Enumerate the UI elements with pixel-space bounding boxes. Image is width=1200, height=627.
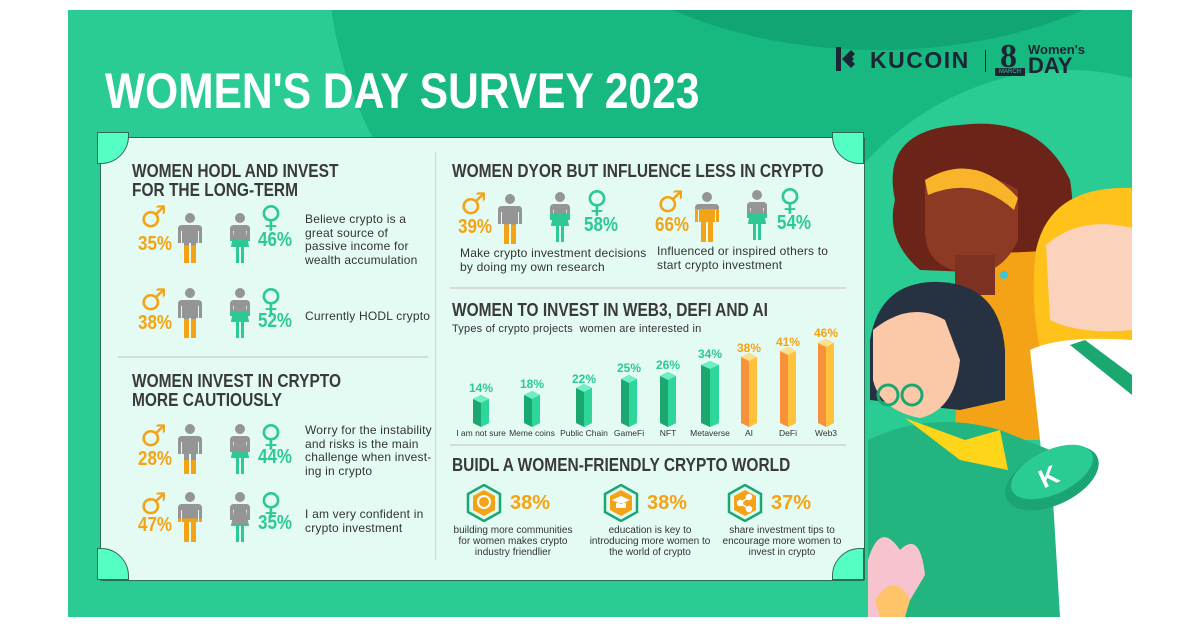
row: hodl crypto: Currently HODL crypto (305, 309, 430, 323)
illustration: women: K (1034, 459, 1064, 494)
heading: web3: WOMEN TO INVEST IN WEB3, DEFI AND AI (452, 300, 768, 320)
logo: KuCoin and Women's Day: MARCH (999, 69, 1021, 75)
item: share tips: 37% (771, 492, 811, 514)
row: influenced (655, 183, 828, 272)
logo: KuCoin and Women's Day: KUCOIN (870, 47, 970, 73)
bar chart: GameFi (614, 428, 644, 438)
row: hodl crypto: ♂ (140, 283, 167, 318)
heading: cautiously: MORE CAUTIOUSLY (132, 390, 282, 410)
item: share tips: share investment tips to encourage more women to invest in crypto (723, 525, 841, 558)
row: passive income: 35% (138, 233, 172, 255)
row: own research: 39% (458, 216, 492, 238)
bar chart: 18% (520, 377, 544, 391)
bar chart: Metaverse (690, 428, 730, 438)
bar chart: Web3 (815, 428, 837, 438)
row: influenced: 54% (777, 212, 811, 234)
row: own research: Make crypto investment decisions by doing my own research (460, 246, 646, 274)
row: passive income (138, 200, 418, 266)
row: own research: ♀ (586, 185, 608, 220)
item: share tips (722, 484, 841, 558)
item: communities: 38% (510, 492, 550, 514)
heading: hodl (132, 161, 338, 200)
logo: KuCoin and Women's Day: DAY (1028, 53, 1072, 78)
row: influenced: ♀ (779, 183, 801, 218)
heading: hodl: WOMEN HODL AND INVEST (132, 161, 338, 181)
row: influenced: Influenced or inspired others to start crypto investment (657, 244, 828, 272)
row: influenced: ♂ (657, 185, 684, 220)
bar chart: Public Chain (560, 428, 608, 438)
bar chart: 26% (656, 358, 680, 372)
heading: dyor: WOMEN DYOR BUT INFLUENCE LESS IN CRYPTO (452, 161, 824, 181)
row: confident: 47% (138, 514, 172, 536)
row: passive income: 46% (258, 229, 292, 251)
row: confident: I am very confident in crypto investment (305, 507, 423, 534)
row: worry: Worry for the instability and risks is the main challenge when invest-ing in crypto (305, 423, 432, 478)
row: worry: ♂ (140, 419, 167, 454)
row: passive income: ♂ (140, 200, 167, 235)
row: hodl crypto: 38% (138, 312, 172, 334)
bar chart: I am not sure (456, 428, 506, 438)
bar chart: AI (745, 428, 753, 438)
row: confident: ♀ (260, 487, 282, 522)
bar chart (456, 326, 838, 438)
bar chart: 34% (698, 347, 722, 361)
row: passive income: ♀ (260, 200, 282, 235)
row: own research: 58% (584, 214, 618, 236)
subtitle: Types of crypto projects women are interested in (452, 323, 701, 335)
bar chart: 25% (617, 361, 641, 375)
row: confident: ♂ (140, 487, 167, 522)
bar chart: DeFi (779, 428, 797, 438)
row: worry: 44% (258, 446, 292, 468)
main panel (100, 137, 865, 581)
logo: KuCoin and Women's Day: 8 (1000, 38, 1017, 75)
heading: hodl: FOR THE LONG-TERM (132, 180, 298, 200)
row: own research (458, 185, 646, 274)
logo: KuCoin and Women's Day (836, 38, 1085, 78)
row: worry (138, 419, 432, 478)
bar chart: 38% (737, 341, 761, 355)
item: education: 38% (647, 492, 687, 514)
item: education: education is key to introducing more women to the world of crypto (590, 525, 710, 558)
item: communities (454, 484, 572, 558)
bar chart: 46% (814, 326, 838, 340)
row: passive income: Believe crypto is a great source of passive income for wealth accumulation (305, 212, 418, 266)
row: confident (138, 487, 423, 542)
heading: cautiously (132, 371, 341, 410)
bar chart: 41% (776, 335, 800, 349)
illustration: women (868, 124, 1132, 617)
bar chart: 22% (572, 372, 596, 386)
bar chart: NFT (660, 428, 676, 438)
row: hodl crypto (138, 283, 430, 338)
title: WOMEN'S DAY SURVEY 2023 (105, 63, 699, 119)
row: influenced: 66% (655, 214, 689, 236)
row: hodl crypto: ♀ (260, 283, 282, 318)
bar chart: Meme coins (509, 428, 555, 438)
row: confident: 35% (258, 512, 292, 534)
row: worry: 28% (138, 448, 172, 470)
item: communities: building more communities for women makes crypto industry friendlier (454, 525, 572, 558)
row: worry: ♀ (260, 419, 282, 454)
item: education (590, 484, 710, 558)
heading: buidl: BUIDL A WOMEN-FRIENDLY CRYPTO WORLD (452, 455, 790, 475)
logo: KuCoin and Women's Day: Women's (1028, 42, 1085, 57)
heading: cautiously: WOMEN INVEST IN CRYPTO (132, 371, 341, 391)
row: own research: ♂ (460, 187, 487, 222)
row: hodl crypto: 52% (258, 310, 292, 332)
bar chart: 14% (469, 381, 493, 395)
